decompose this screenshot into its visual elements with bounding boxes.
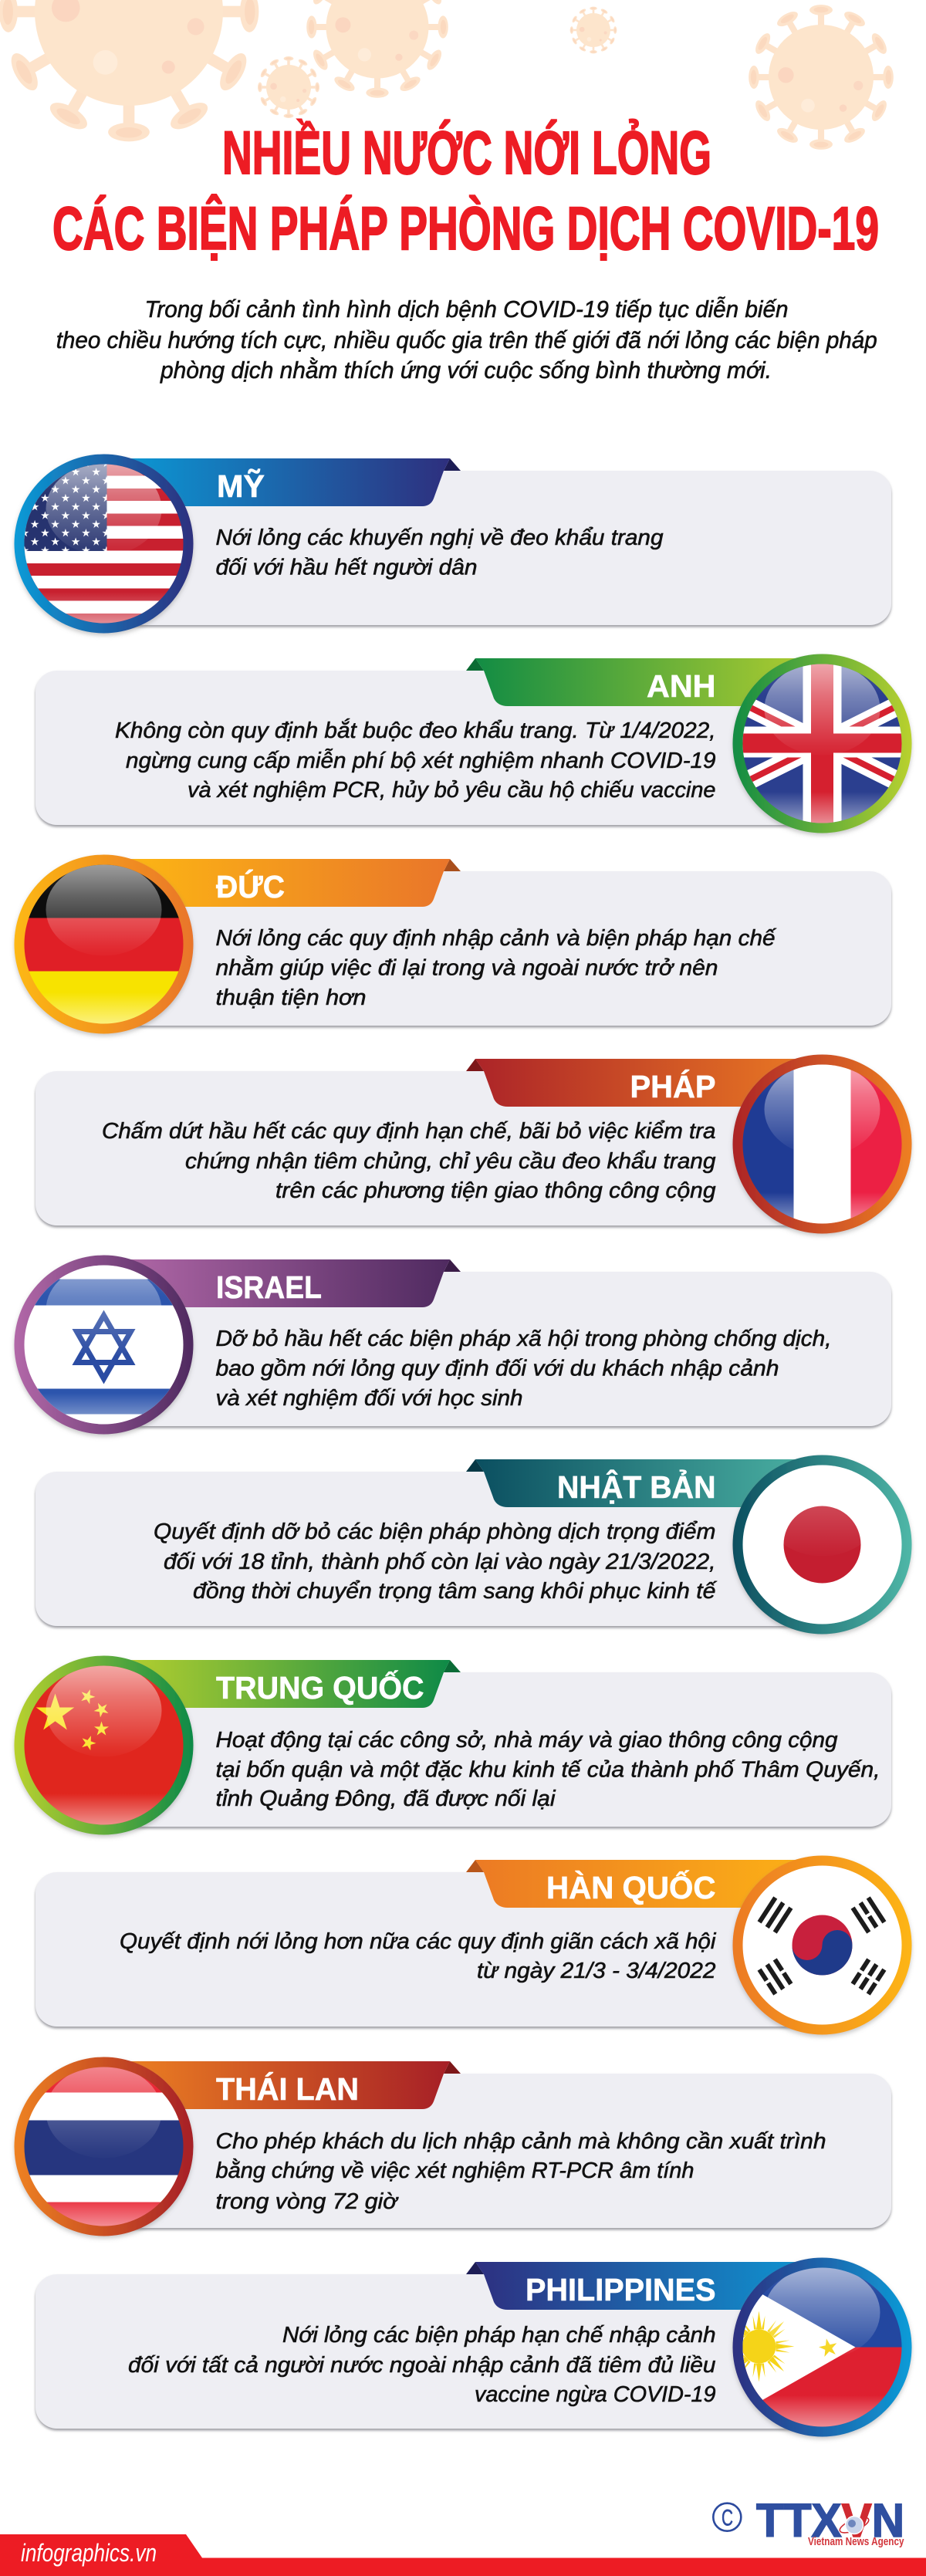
panel: Hàn Quốc [35, 1855, 912, 2034]
card background [35, 1071, 833, 1225]
panel: Anh [35, 654, 915, 833]
card background [35, 2274, 833, 2429]
globe emblem [838, 2514, 870, 2536]
ribbon [116, 1259, 461, 1307]
description: Quyết định nới lỏng hơn nữa các quy định giãn cách xã hội [120, 1929, 717, 1954]
description [128, 2323, 716, 2407]
description [115, 718, 716, 803]
country name: TRUNG QUỐC [216, 1670, 424, 1706]
copyright mark [713, 2503, 741, 2531]
card background [35, 1472, 833, 1626]
country name: ANH [647, 668, 716, 704]
description: đối với tất cả người nước ngoài nhập cảnh đã tiêm đủ liều [128, 2353, 716, 2378]
footer band [0, 2534, 926, 2576]
description: Nới lỏng các biện pháp hạn chế nhập cảnh [282, 2323, 716, 2348]
card background [93, 1672, 891, 1827]
description: trên các phương tiện giao thông công cộng [275, 1178, 716, 1203]
description: Nới lỏng các khuyến nghị về đeo khẩu trang [216, 526, 664, 550]
description: từ ngày 21/3 - 3/4/2022 [477, 1959, 716, 1983]
description: trong vòng 72 giờ [216, 2189, 399, 2214]
ribbon [466, 1059, 833, 1107]
panel: Đức [14, 855, 891, 1034]
logo: TTXVN [713, 2494, 904, 2548]
ribbon [466, 1860, 833, 1908]
card background [35, 671, 833, 825]
description [216, 1728, 880, 1811]
intro text: phòng dịch nhằm thích ứng với cuộc sống bình thường mới. [160, 357, 772, 384]
agency wordmark: TTXVN [756, 2494, 904, 2547]
description: và xét nghiệm đối với học sinh [216, 1386, 523, 1411]
panel: Pháp [35, 1054, 912, 1233]
description: thuận tiện hơn [216, 985, 366, 1010]
description: đồng thời chuyển trọng tâm sang khôi phục kinh tế [193, 1579, 717, 1604]
description [216, 2129, 826, 2214]
panel: Thái Lan [14, 2057, 891, 2236]
ribbon [116, 1660, 461, 1708]
country name: THÁI LAN [216, 2071, 359, 2107]
description: Không còn quy định bắt buộc đeo khẩu trang. Từ 1/4/2022, [115, 718, 716, 743]
description: Dỡ bỏ hầu hết các biện pháp xã hội trong phòng chống dịch, [216, 1327, 832, 1351]
intro text: theo chiều hướng tích cực, nhiều quốc gia trên thế giới đã nới lỏng các biện pháp [56, 326, 877, 353]
description [216, 526, 664, 580]
description [102, 1119, 716, 1203]
description: đối với 18 tỉnh, thành phố còn lại vào ngày 21/3/2022, [164, 1550, 716, 1574]
description: Hoạt động tại các công sở, nhà máy và giao thông công cộng [216, 1728, 838, 1753]
country name: ĐỨC [216, 869, 285, 904]
description: bằng chứng về việc xét nghiệm RT-PCR âm tính [216, 2158, 694, 2183]
description [216, 926, 776, 1010]
description [216, 1327, 832, 1411]
icon: Chinese flag [14, 1656, 193, 1835]
ribbon [116, 2061, 461, 2109]
country name: HÀN QUỐC [546, 1870, 716, 1905]
icon: Japanese flag [733, 1455, 912, 1635]
description: Nới lỏng các quy định nhập cảnh và biện pháp hạn chế [216, 926, 776, 951]
icon: Korean flag [733, 1855, 912, 2034]
panel: Philippines [35, 2258, 912, 2437]
country name: PHÁP [630, 1069, 716, 1104]
description [120, 1929, 717, 1983]
intro text: Trong bối cảnh tình hình dịch bệnh COVID-19 tiếp tục diễn biến [145, 296, 789, 323]
icon: UK flag [730, 654, 915, 833]
icon: Philippine flag [724, 2258, 912, 2437]
ribbon [466, 2262, 833, 2310]
icon: German flag [14, 855, 193, 1034]
card background [93, 471, 891, 625]
country name: MỸ [217, 468, 265, 504]
panel: Mỹ [14, 454, 891, 633]
description: chứng nhận tiêm chủng, chỉ yêu cầu đeo khẩu trang [185, 1149, 716, 1174]
icon: Israeli flag [14, 1255, 193, 1434]
ribbon [466, 1459, 833, 1507]
country name: ISRAEL [216, 1269, 322, 1305]
description: Cho phép khách du lịch nhập cảnh mà không cần xuất trình [216, 2129, 826, 2154]
country name: NHẬT BẢN [557, 1469, 716, 1505]
card background [93, 871, 891, 1026]
panel: Israel [14, 1255, 891, 1434]
card background [35, 1872, 833, 2027]
country name: PHILIPPINES [526, 2272, 716, 2307]
title [52, 118, 879, 262]
virus background decoration [0, 0, 894, 150]
description: đối với hầu hết người dân [216, 556, 477, 580]
description: vaccine ngừa COVID-19 [475, 2382, 716, 2407]
panel: Trung Quốc [14, 1656, 891, 1835]
description: ngừng cung cấp miễn phí bộ xét nghiệm nhanh COVID-19 [126, 748, 716, 773]
description: nhằm giúp việc đi lại trong và ngoài nước trở nên [216, 955, 718, 980]
title: NHIỀU NƯỚC NỚI LỎNG [222, 118, 711, 187]
icon: Thai flag [14, 2057, 193, 2236]
icon: US flag [14, 454, 193, 633]
website: infographics.vn [21, 2539, 157, 2567]
ribbon [466, 658, 833, 706]
description: tại bốn quận và một đặc khu kinh tế của thành phố Thâm Quyến, [216, 1758, 880, 1783]
description: Quyết định dỡ bỏ các biện pháp phòng dịch trọng điểm [154, 1520, 715, 1544]
intro text [56, 296, 877, 384]
description: tỉnh Quảng Đông, đã được nối lại [216, 1787, 556, 1811]
description: bao gồm nới lỏng quy định đối với du khách nhập cảnh [216, 1357, 779, 1381]
card background [93, 2074, 891, 2228]
description: và xét nghiệm PCR, hủy bỏ yêu cầu hộ chiếu vaccine [188, 778, 716, 803]
agency tagline: Vietnam News Agency [808, 2536, 904, 2548]
description [154, 1520, 717, 1604]
panel: Nhật Bản [35, 1455, 912, 1635]
icon: French flag [733, 1054, 912, 1233]
ribbon [116, 458, 461, 506]
copyright mark: C [722, 2505, 733, 2531]
ribbon [116, 859, 461, 907]
card background [93, 1272, 891, 1426]
description: Chấm dứt hầu hết các quy định hạn chế, bãi bỏ việc kiểm tra [102, 1119, 716, 1144]
